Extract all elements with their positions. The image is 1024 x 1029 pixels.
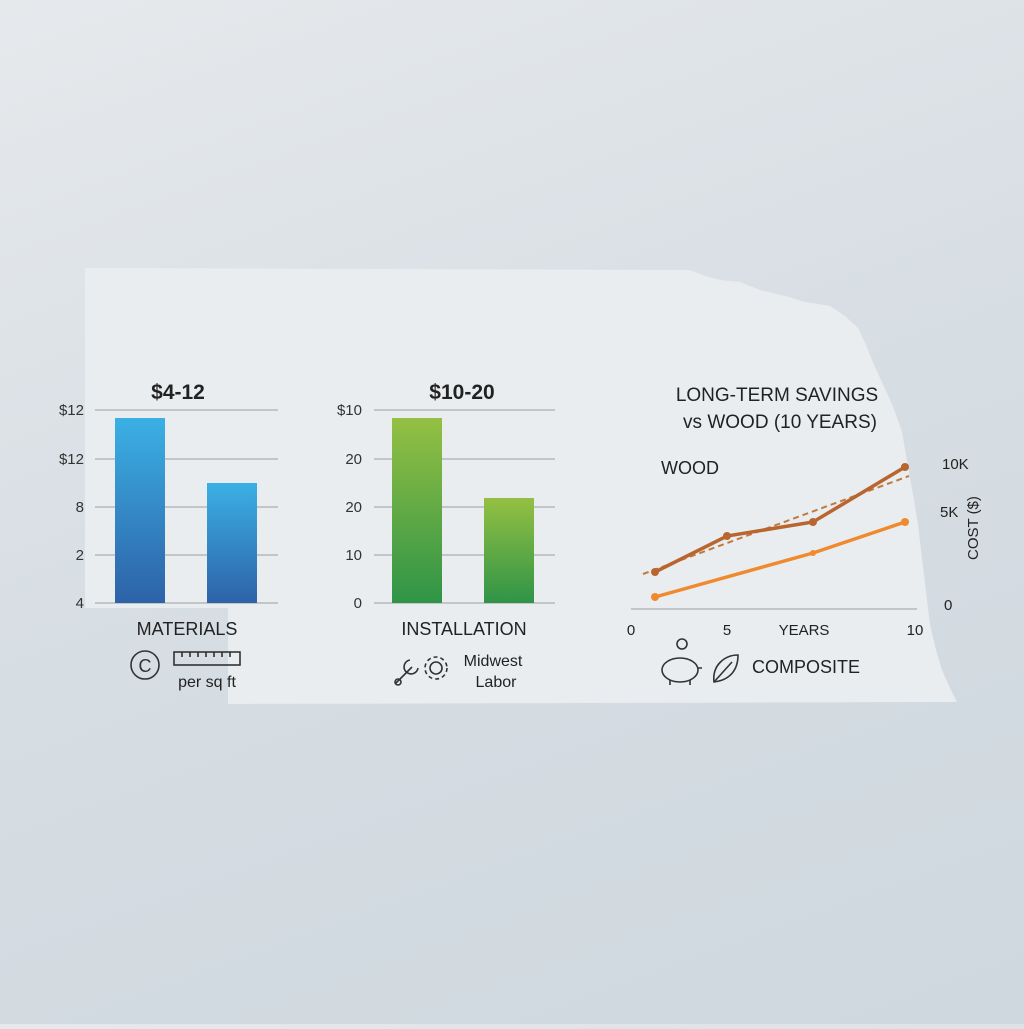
heading: LONG-TERM SAVINGS [676, 385, 878, 406]
line: wood trend dashed [643, 476, 909, 574]
y axis labels: 2 [76, 547, 84, 564]
icon: wrench and gear [395, 657, 447, 685]
line: composite [655, 522, 905, 597]
icon: ruler [174, 652, 240, 665]
chart: long-term savings line chart: 0 [627, 622, 635, 639]
heading: $4-12: $4-12 [151, 381, 205, 404]
label: materials: MATERIALS [137, 619, 237, 639]
chart: materials: per sq ft [178, 674, 236, 691]
icon: piggy bank [662, 639, 702, 685]
chart: materials [59, 381, 278, 691]
chart: long-term savings line chart: YEARS [779, 622, 829, 639]
y axis labels: 8 [76, 499, 84, 516]
heading: $10-20: $10-20 [429, 381, 495, 404]
chart: long-term savings line chart: 5 [723, 622, 731, 639]
chart: long-term savings line chart: 10K [942, 456, 969, 473]
icon: copyright coin: C [138, 656, 152, 676]
icon: copyright coin [131, 651, 159, 679]
label: composite: COMPOSITE [752, 657, 860, 677]
y axis labels: $12 [59, 402, 84, 419]
chart: installation: Labor [476, 674, 517, 691]
chart: long-term savings line chart: 5K [940, 504, 958, 521]
label: wood: WOOD [661, 458, 719, 478]
axis [631, 608, 917, 610]
chart: installation [337, 381, 555, 691]
chart: installation: 10 [345, 547, 362, 564]
bars [115, 418, 165, 603]
chart: installation: Midwest [464, 653, 523, 670]
chart: installation: $10 [337, 402, 362, 419]
chart: long-term savings line chart: COST ($) [965, 496, 982, 560]
chart: long-term savings line chart [627, 385, 982, 685]
y axis labels: 4 [76, 595, 84, 612]
label: installation: INSTALLATION [401, 619, 527, 639]
chart: long-term savings line chart: 10 [907, 622, 923, 639]
y axis labels [59, 402, 84, 612]
chart: long-term savings line chart: 0 [944, 597, 952, 614]
line: wood [655, 467, 905, 572]
map: Nebraska shape [85, 268, 957, 704]
y axis labels: $12 [59, 451, 84, 468]
chart: installation: 20 [345, 499, 362, 516]
chart: long-term savings line chart: vs WOOD (10 YEARS) [683, 412, 877, 433]
chart: installation: 0 [354, 595, 362, 612]
icon: leaf [714, 655, 738, 682]
chart: installation: 20 [345, 451, 362, 468]
